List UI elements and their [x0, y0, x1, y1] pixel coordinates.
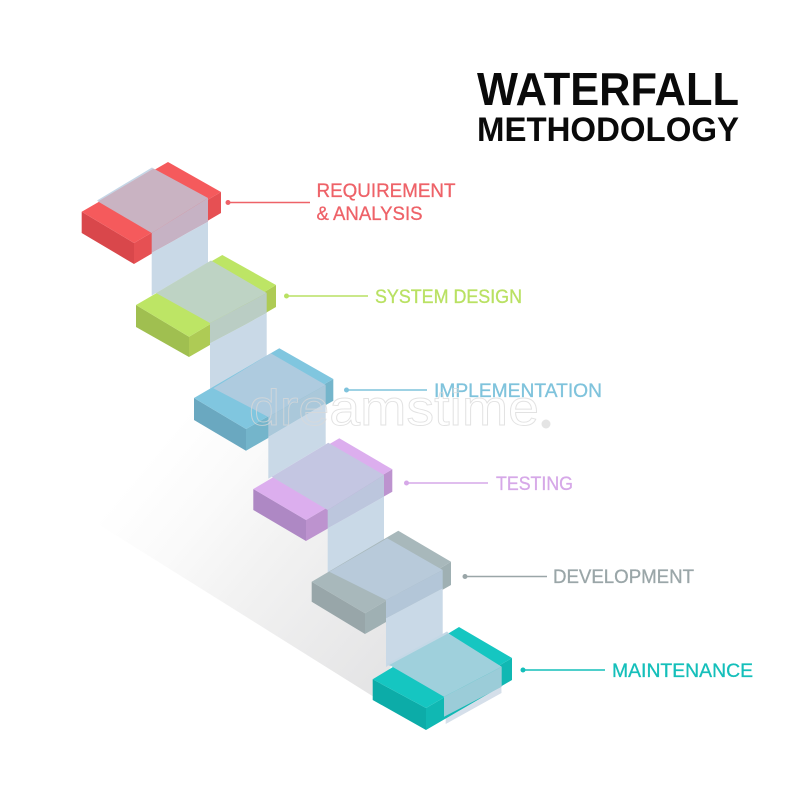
sheet falling from step 5 to step 6	[386, 588, 443, 667]
watermark: dreamstime	[249, 380, 539, 436]
label: system design: SYSTEM DESIGN	[375, 287, 522, 308]
step 5: development block	[312, 531, 451, 634]
label: implementation: IMPLEMENTATION	[434, 381, 602, 402]
title: METHODOLOGY	[477, 111, 739, 149]
sheet falling from step 4 to step 5	[328, 497, 384, 573]
label: maintenance	[520, 661, 753, 682]
label: implementation	[344, 381, 602, 402]
sheet falling from step 3 to step 4	[268, 403, 326, 479]
label: system design	[284, 287, 522, 308]
step 1: requirement block	[82, 162, 221, 264]
label: requirement and analysis	[226, 181, 456, 225]
label: maintenance: MAINTENANCE	[612, 661, 753, 682]
label: development	[462, 567, 694, 588]
step 6: maintenance block	[373, 627, 512, 730]
label: testing: TESTING	[496, 474, 573, 495]
label: testing	[404, 474, 573, 495]
label: requirement and analysis: & ANALYSIS	[316, 204, 422, 225]
title	[477, 63, 739, 149]
title: WATERFALL	[477, 63, 739, 115]
step 2: system design block	[136, 255, 276, 357]
sheet falling from step 2 to step 3	[210, 313, 267, 390]
sheet falling from step 1 to step 2	[152, 222, 208, 296]
label: requirement and analysis: REQUIREMENT	[316, 181, 456, 202]
step 3: implementation block	[194, 348, 333, 451]
step 4: testing block	[253, 438, 392, 541]
cast shadow	[90, 350, 400, 697]
label: development: DEVELOPMENT	[553, 567, 694, 588]
